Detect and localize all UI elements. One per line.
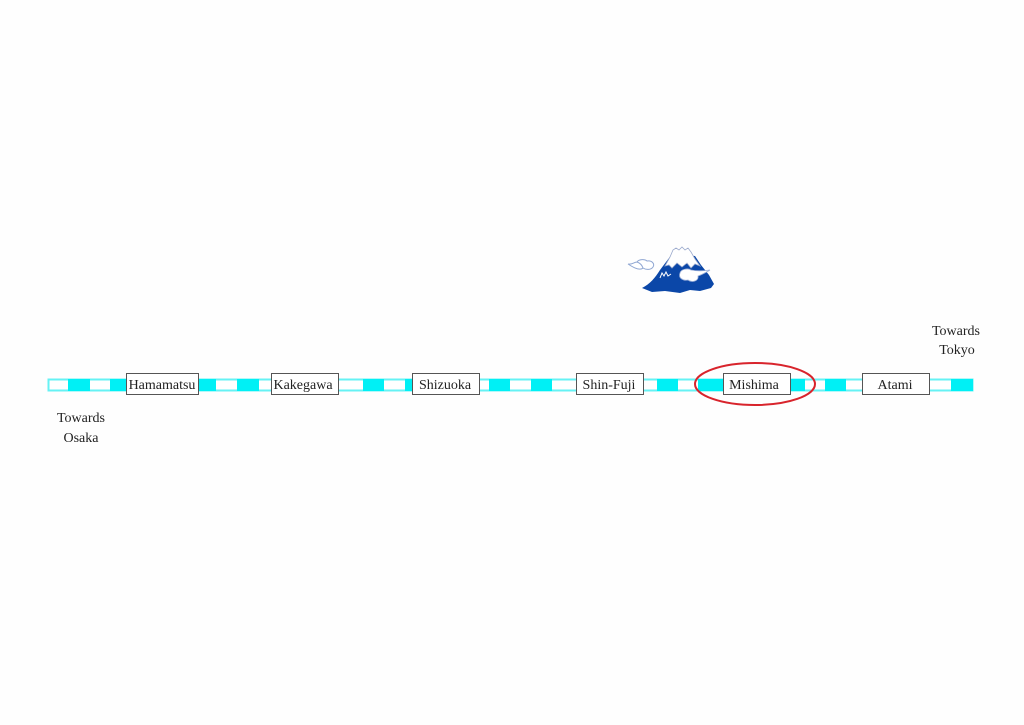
label: towards Tokyo: Tokyo — [939, 343, 975, 358]
label: towards Tokyo — [932, 324, 980, 358]
icon: cloud — [628, 260, 654, 269]
station: Shizuoka: Shizuoka — [419, 378, 472, 393]
rail line — [48, 379, 973, 391]
label: towards Tokyo: Towards — [932, 324, 980, 339]
callout: red ellipse around Mishima — [695, 363, 815, 405]
station: Shizuoka — [412, 374, 480, 394]
station: Shin-Fuji: Shin-Fuji — [583, 378, 636, 393]
label: towards Osaka: Towards — [57, 411, 105, 426]
station: Mishima — [724, 374, 790, 394]
station: Kakegawa: Kakegawa — [273, 378, 333, 393]
station: Kakegawa — [272, 374, 338, 394]
label: towards Osaka — [57, 411, 105, 446]
station: Atami: Atami — [878, 378, 913, 393]
station: Shin-Fuji — [576, 374, 644, 394]
label: towards Osaka: Osaka — [64, 431, 99, 446]
station: Mishima: Mishima — [729, 378, 780, 393]
icon: Mount Fuji — [628, 247, 714, 293]
station: Atami — [862, 374, 930, 394]
station: Hamamatsu — [126, 374, 198, 394]
station: Hamamatsu: Hamamatsu — [129, 378, 195, 393]
